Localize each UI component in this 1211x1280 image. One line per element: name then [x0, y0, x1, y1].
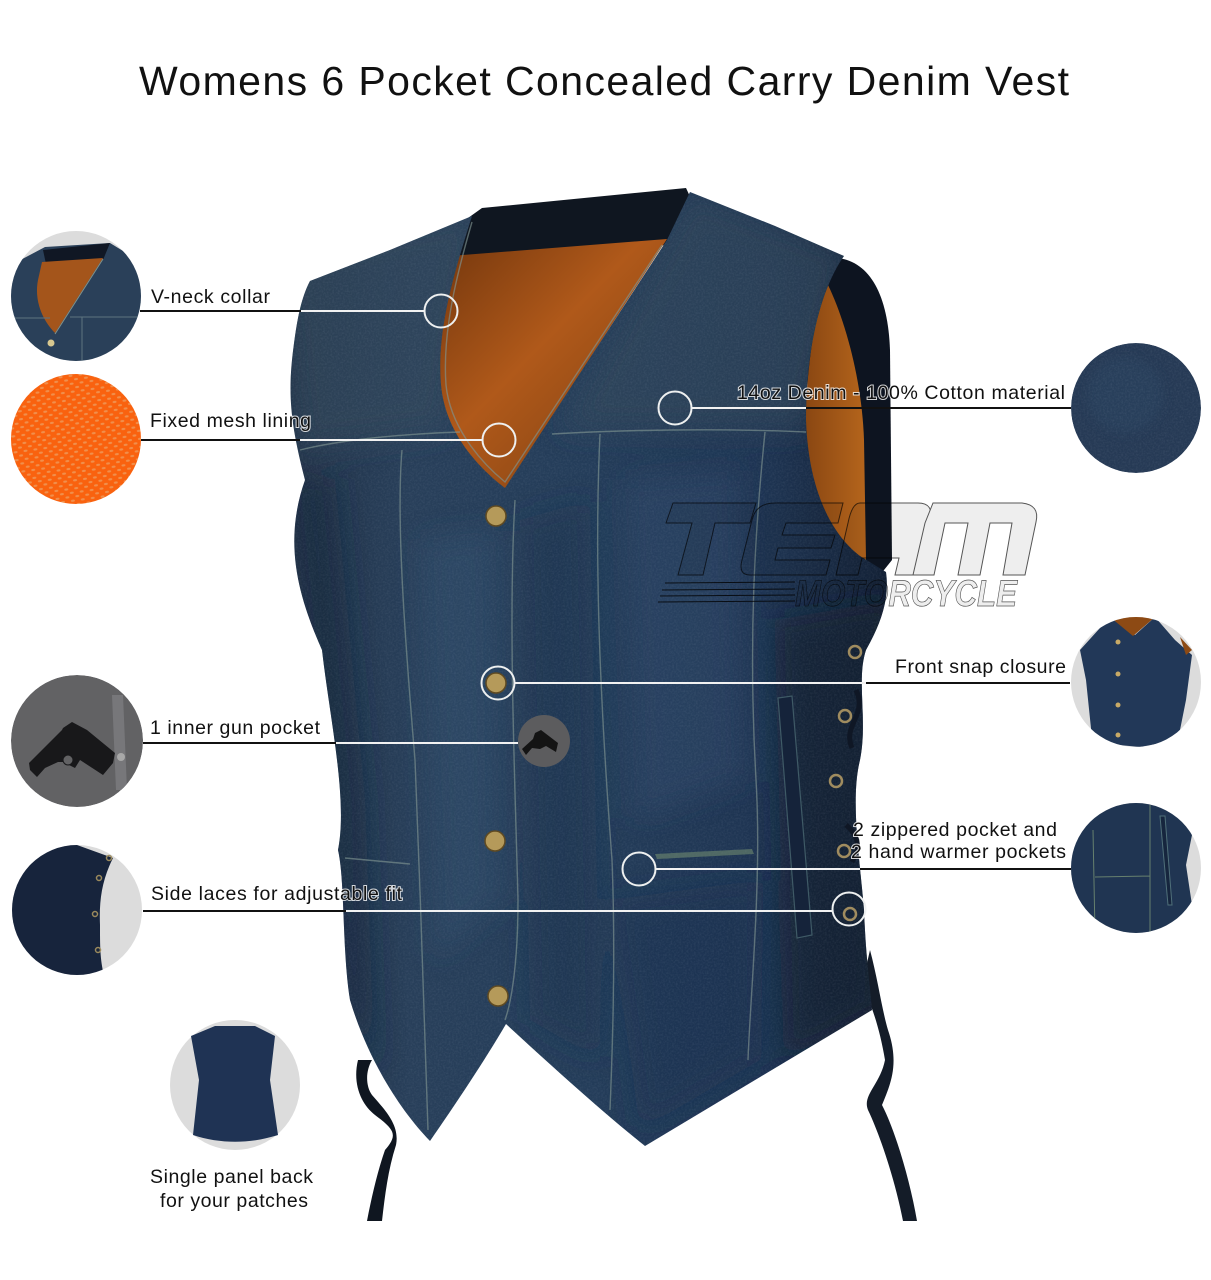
orange mesh lining [425, 239, 667, 490]
icon: pistol silhouette [29, 722, 115, 777]
label: side laces: Side laces for adjustable fit [151, 883, 403, 905]
callout lines [140, 311, 1071, 911]
label: denim material: 14oz Denim - 100% Cotton material [737, 382, 1065, 404]
denim shading [280, 185, 895, 1150]
watermark: TEAM MOTORCYCLE logo [658, 503, 1037, 614]
vest illustration [280, 185, 917, 1221]
zipper pocket [778, 696, 812, 938]
label: fixed mesh lining: Fixed mesh lining [150, 410, 311, 432]
right armhole inner [800, 258, 892, 575]
back collar inside [450, 188, 694, 262]
circle: denim material [1071, 343, 1201, 473]
circle: side laces [12, 845, 142, 975]
snap buttons [485, 506, 508, 1006]
circle: inner gun pocket [11, 675, 143, 807]
circle: single panel back [170, 1020, 300, 1150]
circle: fixed mesh lining [11, 374, 141, 504]
label: V-neck collar: V-neck collar [151, 286, 270, 308]
watermark lines [658, 582, 795, 602]
side lace eyelets [830, 646, 861, 920]
label: single panel back: for your patches [160, 1190, 308, 1212]
title: Womens 6 Pocket Concealed Carry Denim Vest [139, 58, 1070, 104]
circle: front snap closure [1071, 617, 1201, 747]
icon: right drawstring [862, 950, 917, 1221]
label: front snap closure: Front snap closure [895, 656, 1066, 678]
stitching [300, 222, 806, 1130]
hand warmer pocket welt [655, 849, 754, 859]
watermark letters [666, 503, 1037, 575]
label: pockets: 2 zippered pocket and [853, 819, 1057, 841]
label: pockets [851, 819, 1066, 863]
denim body [291, 192, 887, 1146]
white callout line segments over vest [300, 311, 866, 911]
watermark wordmark: MOTORCYCLE [795, 573, 1018, 614]
callout ring markers [424, 294, 866, 926]
circle: V-neck collar [11, 231, 141, 361]
label: single panel back: Single panel back [150, 1166, 313, 1188]
icon: left drawstring [356, 1060, 397, 1221]
label: inner gun pocket: 1 inner gun pocket [150, 717, 321, 739]
label: pockets: 2 hand warmer pockets [851, 841, 1066, 863]
icon: gun pocket marker [518, 715, 570, 767]
label: single panel back [150, 1166, 313, 1212]
side lace cord [846, 690, 859, 862]
circle: pockets [1071, 803, 1201, 933]
